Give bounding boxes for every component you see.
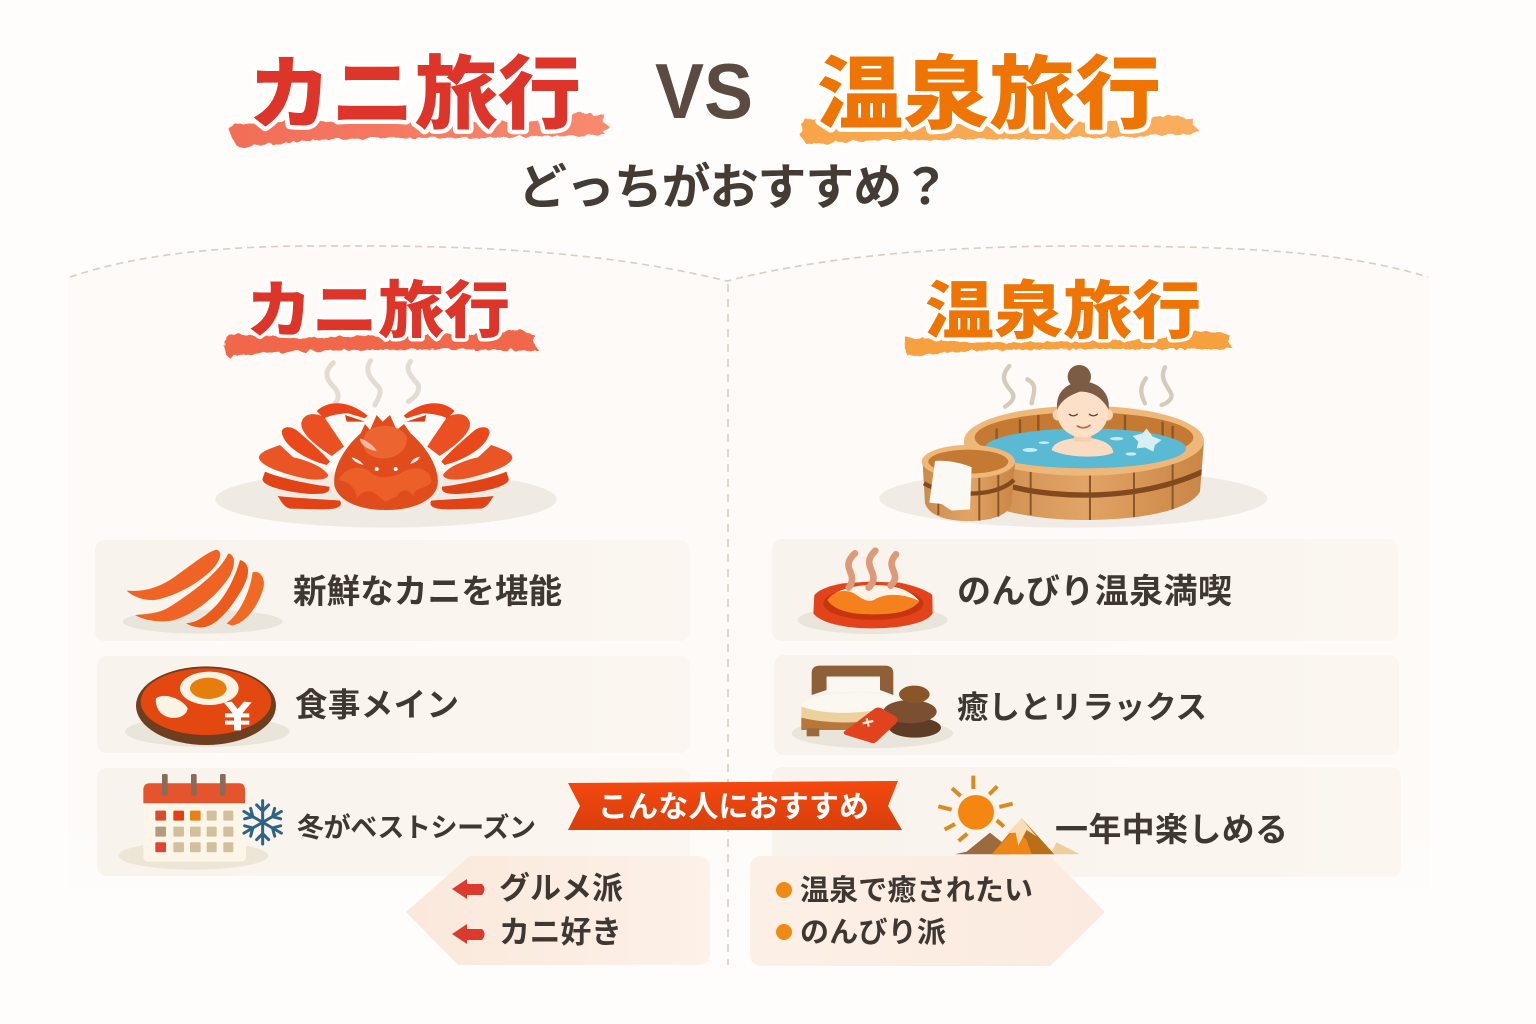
brush stroke: crab title xyxy=(229,113,610,147)
callout: onsen recommendation xyxy=(750,856,1105,966)
bucket xyxy=(923,463,1015,521)
sub heading brush: onsen xyxy=(903,330,1233,356)
row background xyxy=(772,539,1398,641)
heading: crab trip: カニ旅行 xyxy=(248,50,581,139)
icon: crab legs xyxy=(123,550,283,634)
icon: plate of food xyxy=(125,666,290,747)
illustration: woman in wooden tub xyxy=(879,365,1267,528)
callout: crab recommendation xyxy=(406,856,710,965)
row background xyxy=(774,655,1399,755)
row background xyxy=(97,768,690,876)
icon: hot spring steam xyxy=(798,551,948,634)
text: laid-back: のんびり派 xyxy=(800,916,946,949)
subtitle: どっちがおすすめ？ xyxy=(518,161,950,215)
brush stroke: onsen title xyxy=(800,115,1199,144)
sub heading: onsen trip: 温泉旅行 xyxy=(925,277,1201,347)
text: gourmet: グルメ派 xyxy=(499,871,623,906)
panel: onsen trip xyxy=(772,277,1401,877)
row text: 一年中楽しめる xyxy=(1055,811,1288,848)
row text: 癒しとリラックス xyxy=(957,689,1207,725)
heading: onsen trip: 温泉旅行 xyxy=(817,50,1161,139)
row text: のんびり温泉満喫 xyxy=(957,573,1232,611)
item row: relaxing bath xyxy=(772,539,1398,641)
sub heading: crab trip: カニ旅行 xyxy=(246,277,510,346)
icon: bed, stones and charm xyxy=(792,666,953,748)
row text: 冬がベストシーズン xyxy=(297,812,536,843)
infographic canvas xyxy=(70,52,1428,966)
row text: 食事メイン xyxy=(295,687,459,723)
row background xyxy=(95,540,690,641)
item row: fresh crab xyxy=(95,540,690,641)
item row: meals xyxy=(97,656,690,753)
VS mark: VS xyxy=(655,47,753,135)
bullet xyxy=(776,882,792,898)
arrow icon xyxy=(452,879,484,899)
panel: background panels xyxy=(68,246,1430,965)
illustration: steaming crab xyxy=(215,361,557,528)
row background xyxy=(97,656,690,753)
title xyxy=(229,47,1199,215)
item row: all year xyxy=(772,767,1401,877)
text: crab lovers: カニ好き xyxy=(499,915,622,950)
panel: crab trip xyxy=(95,277,690,876)
banner: recommended for xyxy=(568,781,902,830)
tub body xyxy=(963,440,1205,522)
banner: recommended for: こんな人におすすめ xyxy=(598,791,869,824)
text: want healing: 温泉で癒されたい xyxy=(800,874,1033,907)
icon: calendar and snowflake xyxy=(118,774,284,870)
row background xyxy=(772,767,1401,877)
bullet xyxy=(776,924,792,940)
arrow icon xyxy=(452,924,484,944)
row text: 新鮮なカニを堪能 xyxy=(293,574,562,611)
icon: sun and mountains xyxy=(938,776,1080,854)
item row: winter season xyxy=(97,768,690,876)
item row: healing xyxy=(774,655,1399,755)
sub heading brush: crab xyxy=(223,330,539,357)
